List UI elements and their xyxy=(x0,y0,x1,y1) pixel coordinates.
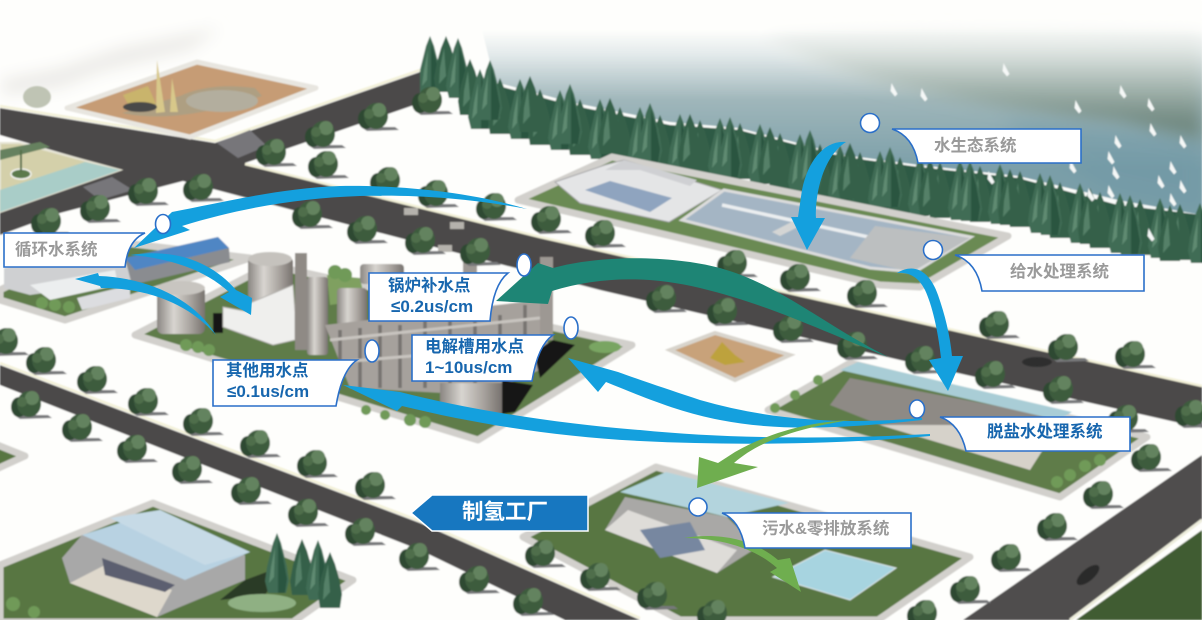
marker: circulating water xyxy=(156,214,170,234)
marker: other use points xyxy=(365,340,379,362)
callout: electrolyser point xyxy=(412,335,553,381)
arrow: factory return to circulating water xyxy=(75,273,216,335)
site: bottom-left hall xyxy=(0,503,353,620)
callout: supply water treatment system xyxy=(955,255,1144,291)
callout: wastewater zero-discharge system: 污水&零排放系统 xyxy=(762,518,890,538)
marker: electrolyser xyxy=(564,317,578,339)
callout: electrolyser point: 1~10us/cm xyxy=(425,358,512,377)
marker: wastewater xyxy=(689,498,707,516)
marker: boiler make-up xyxy=(517,254,531,276)
marker: desalination xyxy=(910,400,924,418)
water and river xyxy=(482,30,1202,215)
arrow: desalination to wastewater (green) xyxy=(697,420,850,488)
callout: other use points: 其他用水点 xyxy=(226,361,308,380)
arrow: circulating water to factory xyxy=(130,253,252,315)
callout: other use points: ≤0.1us/cm xyxy=(227,382,309,401)
arrow: wastewater to pond (green) xyxy=(684,536,801,592)
marker: water ecology xyxy=(860,114,880,132)
callout: water ecology system xyxy=(892,129,1081,163)
callout: circulating water system xyxy=(4,233,145,267)
site: top-left excavation xyxy=(23,60,316,137)
birds xyxy=(890,63,1186,242)
callout: desalination system: 脱盐水处理系统 xyxy=(987,421,1103,441)
callout: boiler make-up point: ≤0.2us/cm xyxy=(391,297,473,316)
site: water treatment plant xyxy=(518,157,1008,287)
site: cooling water buildings xyxy=(0,237,250,320)
site: wastewater building xyxy=(523,467,970,620)
site: small excavation xyxy=(670,333,790,380)
callout: water ecology system: 水生态系统 xyxy=(934,135,1017,155)
top-left park xyxy=(0,142,120,212)
arrow: supply to circulating water xyxy=(134,186,527,248)
callout: boiler make-up point xyxy=(369,273,508,321)
callout: boiler make-up point: 锅炉补水点 xyxy=(388,276,470,295)
callout: wastewater zero-discharge system xyxy=(722,513,911,548)
callout: other use points xyxy=(213,360,357,406)
arrow: boiler make-up water (teal) xyxy=(496,258,888,357)
arrow: desalinated water to electrolyser xyxy=(568,358,922,428)
callout: supply water treatment system: 给水处理系统 xyxy=(1010,261,1110,281)
marker: supply water treatment xyxy=(924,240,942,260)
arrow: water ecology to water supply treatment xyxy=(791,142,846,250)
sign: hydrogen plant xyxy=(411,495,588,531)
callout: electrolyser point: 电解槽用水点 xyxy=(425,337,524,356)
arrow: supply treatment to desalination xyxy=(897,269,963,391)
sign: hydrogen plant: 制氢工厂 xyxy=(462,499,548,524)
site: desalination building xyxy=(768,362,1147,497)
site: hydrogen factory xyxy=(135,252,632,440)
arrow: desalinated water to other use points xyxy=(343,385,930,444)
callout: desalination system xyxy=(940,417,1130,451)
faded distant buildings xyxy=(0,28,220,95)
forest along shore xyxy=(418,36,1202,263)
callout: circulating water system: 循环水系统 xyxy=(15,239,98,259)
small left site corner xyxy=(0,442,25,472)
